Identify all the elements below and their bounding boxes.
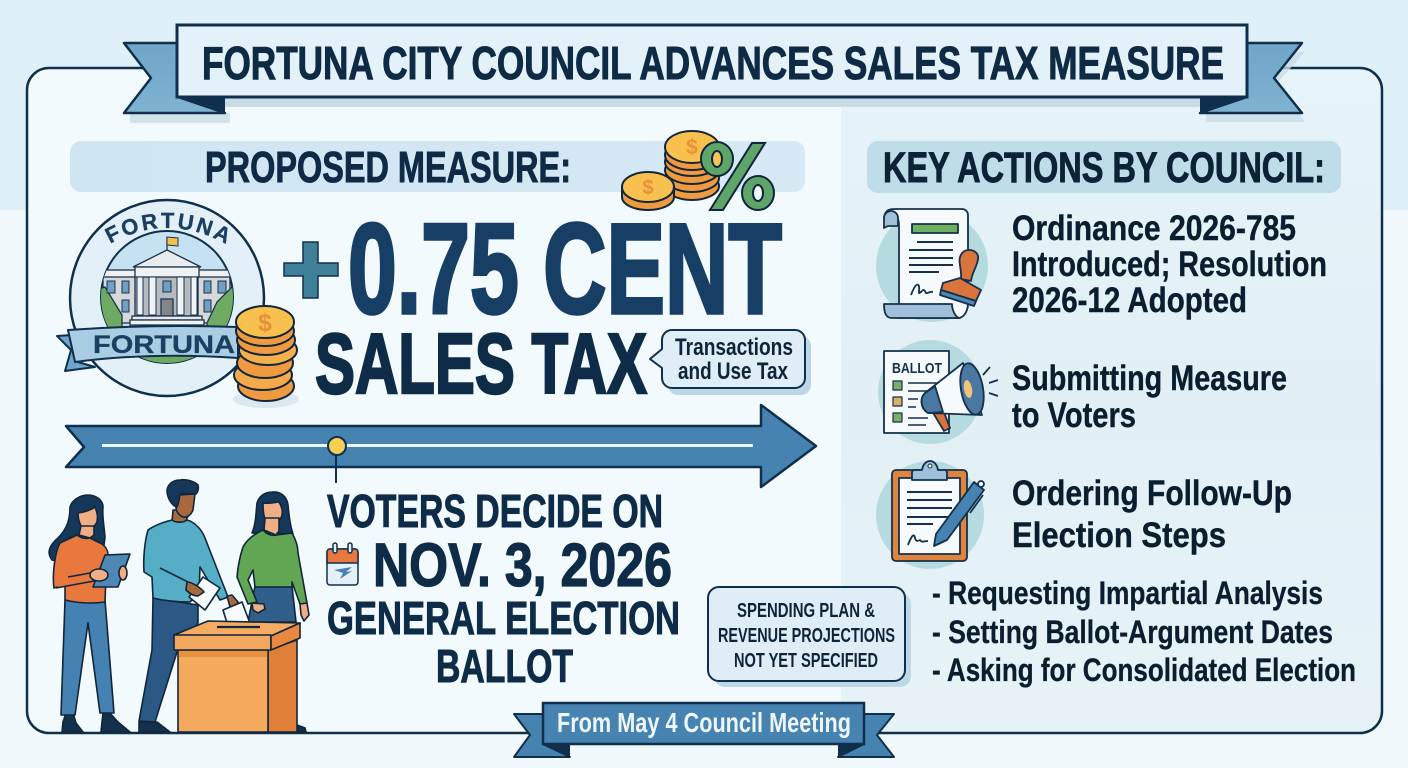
timeline arrow xyxy=(66,405,816,487)
icon: coins and percent sign xyxy=(622,131,774,210)
text: action 2 xyxy=(1012,359,1287,435)
footer ribbon: From May 4 Council Meeting xyxy=(557,707,851,738)
icon: coin stack xyxy=(233,306,299,408)
note: spending plan xyxy=(708,587,911,687)
icon: clipboard and pen xyxy=(876,461,984,569)
text: action 3 xyxy=(1012,474,1292,555)
seal ribbon: FORTUNA xyxy=(93,331,235,359)
woman with tablet xyxy=(49,495,130,732)
headline: 0.75 cent: 0.75 CENT xyxy=(348,198,782,341)
icon: coins and percent sign: $ xyxy=(686,136,698,159)
list: follow-up steps: - Setting Ballot-Argument Dates xyxy=(932,614,1333,650)
title banner xyxy=(124,25,1305,123)
curved seal text: FORTUNA xyxy=(104,212,228,244)
text: action 2: Submitting Measure xyxy=(1012,359,1287,398)
text: action 1: Introduced; Resolution xyxy=(1012,245,1327,284)
text: action 2: to Voters xyxy=(1012,396,1136,435)
illustration: voters at ballot box xyxy=(49,480,309,732)
note: spending plan: NOT YET SPECIFIED xyxy=(734,650,878,672)
callout: transactions and use tax: and Use Tax xyxy=(678,358,789,385)
heading: proposed measure: PROPOSED MEASURE: xyxy=(205,143,571,192)
icon: Fortuna city seal xyxy=(56,198,266,398)
icon: coin stack: $ xyxy=(258,309,272,337)
heading: proposed measure xyxy=(70,141,805,192)
man with ballot xyxy=(139,480,238,732)
text: action 1: 2026-12 Adopted xyxy=(1012,281,1247,320)
text: action 1 xyxy=(1012,209,1327,320)
icon: coins and percent sign: $ xyxy=(642,177,654,199)
timeline marker xyxy=(328,437,346,483)
list: follow-up steps: - Requesting Impartial Analysis xyxy=(932,575,1323,611)
text: voters decide date: GENERAL ELECTION xyxy=(327,592,680,644)
woman in green xyxy=(237,492,309,622)
callout: transactions and use tax: Transactions xyxy=(675,334,793,361)
plus sign xyxy=(284,242,338,298)
icon: ordinance document with stamp xyxy=(876,209,988,322)
ballot box xyxy=(174,602,306,732)
text: action 3: Election Steps xyxy=(1012,516,1226,555)
icon: ballot and megaphone: BALLOT xyxy=(892,360,942,377)
text: action 3: Ordering Follow-Up xyxy=(1012,474,1292,513)
text: voters decide date: BALLOT xyxy=(436,640,573,692)
text: action 1: Ordinance 2026-785 xyxy=(1012,209,1296,248)
icon: calendar xyxy=(327,543,358,585)
callout: transactions and use tax xyxy=(650,330,811,395)
footer ribbon xyxy=(514,703,894,757)
note: spending plan: REVENUE PROJECTIONS xyxy=(718,625,895,647)
icon: ballot and megaphone xyxy=(878,340,998,444)
seal ribbon xyxy=(57,326,238,371)
text: voters decide date: NOV. 3, 2026 xyxy=(373,531,672,599)
text: voters decide date: VOTERS DECIDE ON xyxy=(327,485,663,537)
note: spending plan: SPENDING PLAN & xyxy=(737,600,875,622)
list: follow-up steps xyxy=(932,575,1356,688)
headline: sales tax: SALES TAX xyxy=(315,317,647,412)
text: voters decide date xyxy=(327,485,680,692)
